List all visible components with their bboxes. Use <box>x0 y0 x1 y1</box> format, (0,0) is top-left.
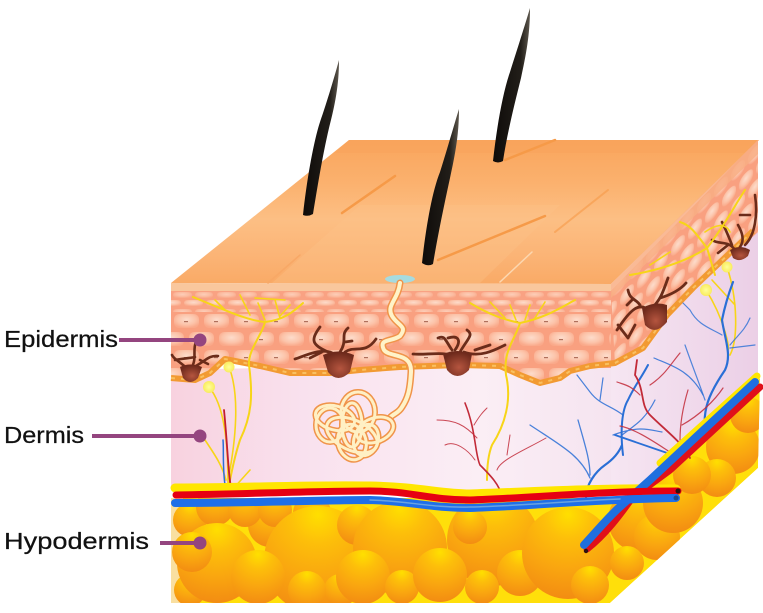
hair 3 <box>422 109 459 265</box>
label: Hypodermis: Hypodermis <box>4 528 149 554</box>
nerves <box>193 190 745 490</box>
hair 1 <box>303 60 339 216</box>
vessel ends <box>584 488 680 553</box>
branching veins <box>223 282 755 497</box>
label: Dermis: Dermis <box>4 422 84 448</box>
melanocytes <box>172 195 756 382</box>
panel: hypodermis fat <box>171 378 763 613</box>
diagonal vein <box>584 382 755 545</box>
panel: epidermis layer <box>171 140 758 385</box>
gland coil <box>313 392 397 463</box>
nerve left <box>193 295 303 490</box>
nerve bulbs <box>203 262 732 393</box>
panel: skin surface <box>171 140 759 291</box>
surface creases <box>268 140 608 283</box>
horizontal artery <box>176 491 678 500</box>
label: Dermis <box>4 422 206 448</box>
sweat gland <box>313 283 411 463</box>
hair 2 <box>493 8 530 162</box>
main blood vessels <box>175 376 760 549</box>
diagonal artery <box>587 387 760 549</box>
nerve center <box>470 300 575 480</box>
label: Epidermis: Epidermis <box>4 326 118 352</box>
melanocyte 3 <box>413 330 505 376</box>
melanocyte 4 <box>617 278 686 338</box>
melanocyte 1 <box>172 342 218 382</box>
melanocyte 2 <box>295 327 376 378</box>
horizontal vein <box>175 498 676 508</box>
nerve right <box>630 190 745 355</box>
label: Hypodermis <box>4 528 206 554</box>
panel: dermis layer <box>171 225 758 490</box>
melanocyte 5 <box>712 195 756 260</box>
yellow nerve band <box>660 376 757 463</box>
basal layer band <box>171 231 753 383</box>
sweat pore <box>385 275 415 283</box>
branching arteries <box>224 353 723 497</box>
label: Epidermis <box>4 326 206 352</box>
